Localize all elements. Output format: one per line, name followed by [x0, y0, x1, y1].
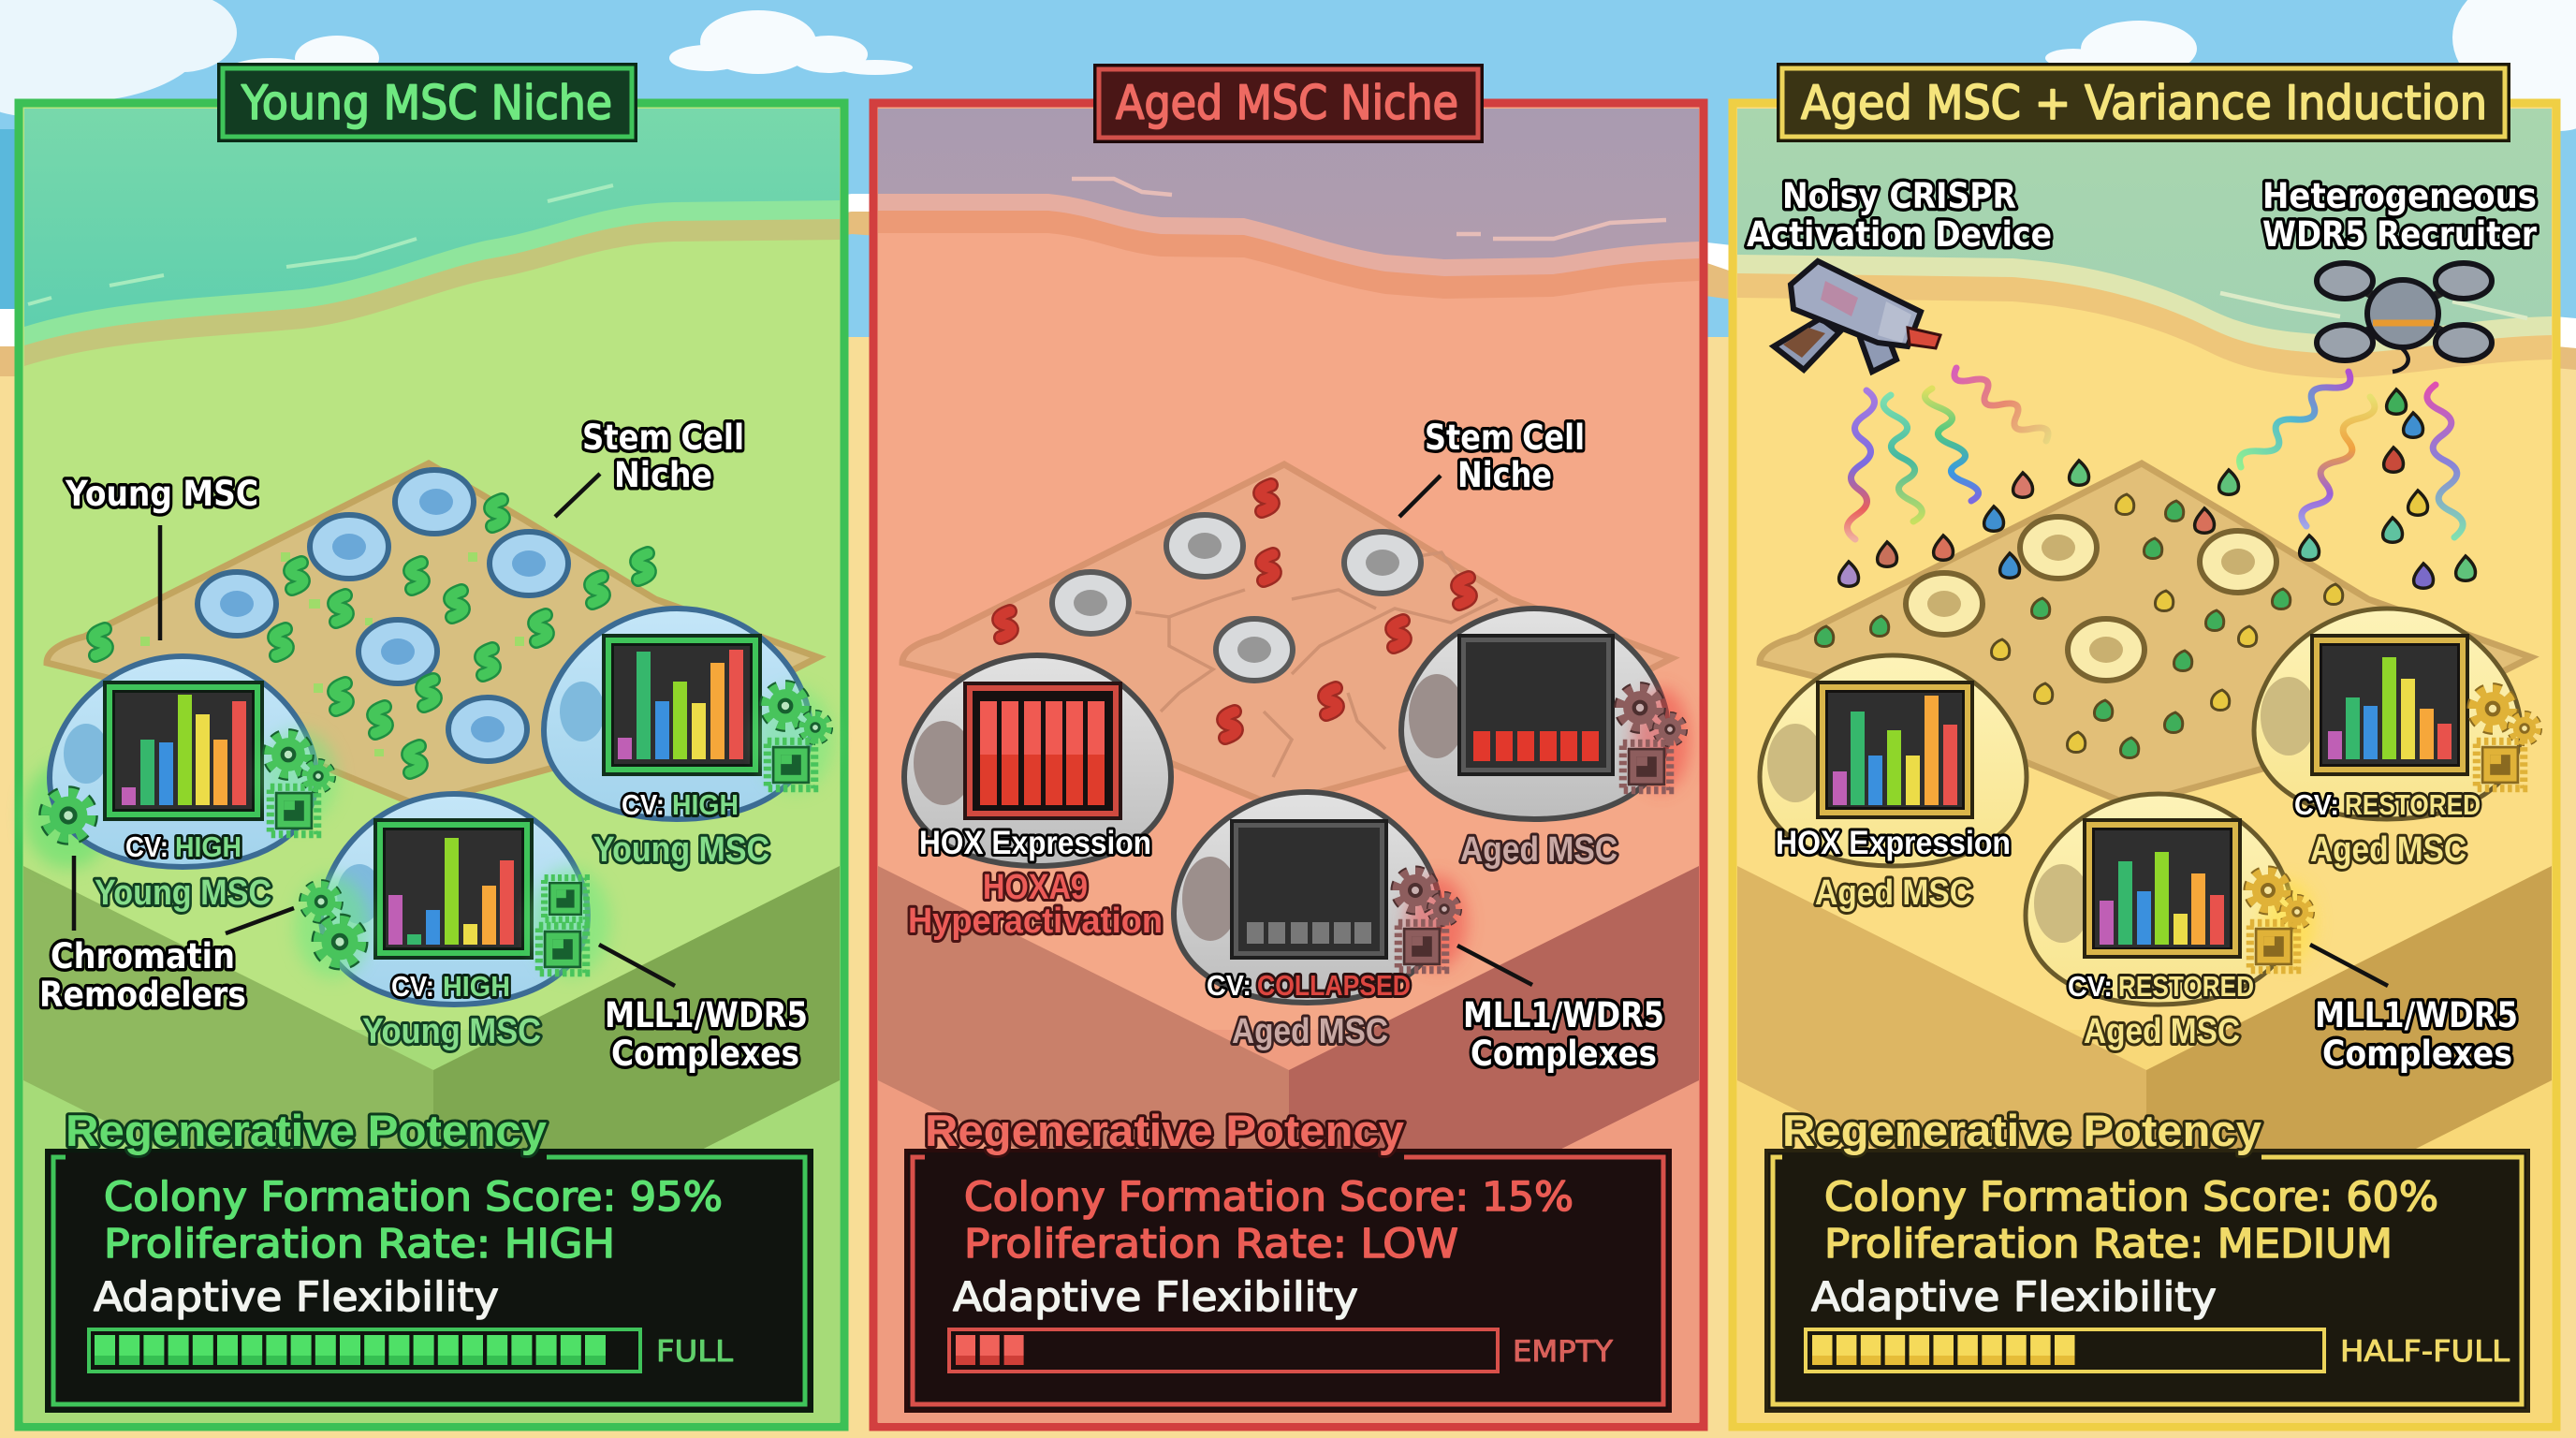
CV restored B: CV:: [2294, 788, 2339, 821]
young MSC cell B: [544, 609, 833, 819]
label: Heterogeneous WDR5 Recruiter: WDR5 Recruiter: [2262, 214, 2538, 255]
panel 2 title badge: [1093, 64, 1484, 143]
colored molecule drops: [1815, 389, 2476, 758]
label: MLL1/WDR5 Complexes: Complexes: [611, 1034, 799, 1074]
heading: Regenerative Potency: Regenerative Potency: [1782, 1106, 2261, 1155]
panel: Aged MSC Niche: [873, 64, 1704, 1427]
colony formation score: Colony Formation Score: 15%: [964, 1174, 1573, 1221]
colony formation score: Colony Formation Score: 60%: [1824, 1174, 2438, 1221]
CV restored C: [2068, 970, 2254, 1003]
stats box: young: [47, 1106, 812, 1411]
colony formation score: Colony Formation Score: 95%: [104, 1174, 723, 1221]
aged MSC cell A hyperactivated: [904, 655, 1171, 866]
CV high C: [391, 970, 510, 1003]
leader line: niche: [1399, 476, 1441, 517]
title text: Aged MSC Niche: [1116, 76, 1458, 130]
label: HOX Expression: HOX Expression: [1776, 825, 2011, 861]
panel 1 frame and ground: [19, 103, 844, 1427]
title text: Young MSC Niche: [241, 76, 612, 130]
monitor with bars: [373, 818, 534, 960]
label: HOXA9 Hyperactivation: HOXA9: [983, 868, 1088, 907]
heterogeneous WDR5 recruiter drone: [2317, 263, 2492, 372]
label: Heterogeneous WDR5 Recruiter: [2262, 176, 2538, 255]
labels aged panel: [908, 418, 1664, 1074]
label: MLL1/WDR5 Complexes: [1463, 995, 1664, 1074]
gears and chips: [295, 868, 610, 978]
leader line: MLL1: [599, 945, 675, 986]
leader line: niche: [555, 474, 600, 517]
panel 2 shoreline and sea: [878, 109, 1699, 299]
proliferation rate: Proliferation Rate: HIGH: [104, 1221, 615, 1268]
stats box: variance: [1766, 1106, 2528, 1411]
progress bar half-full: [1806, 1329, 2324, 1372]
label: MLL1/WDR5 Complexes: [2315, 995, 2518, 1074]
label: HOXA9 Hyperactivation: Hyperactivation: [908, 902, 1163, 941]
small young stem cells: [198, 470, 568, 761]
label: Stem Cell Niche: Stem Cell: [1425, 418, 1585, 458]
title text: Aged MSC + Variance Induction: [1801, 76, 2487, 130]
stats box: aged: [906, 1106, 1670, 1411]
label: MLL1/WDR5 Complexes: Complexes: [2322, 1034, 2512, 1074]
CV collapsed: CV:: [1207, 969, 1251, 1002]
panel 3 shoreline and sea: [1737, 109, 2552, 378]
adaptive flexibility label: Adaptive Flexibility: [94, 1274, 499, 1321]
label: Noisy CRISPR Activation Device: [1747, 176, 2052, 255]
label: MLL1/WDR5 Complexes: MLL1/WDR5: [1463, 995, 1664, 1035]
gears and chip: [2249, 872, 2315, 970]
label: Chromatin Remodelers: Chromatin: [51, 936, 235, 976]
CV high C: CV:: [391, 970, 434, 1003]
label: MLL1/WDR5 Complexes: Complexes: [1471, 1034, 1657, 1074]
CV high A: [125, 830, 242, 863]
niche specks: [140, 552, 588, 756]
restored stem cell niche platform: [1760, 463, 2531, 805]
panel: Aged MSC + Variance Induction: [1733, 63, 2556, 1427]
EMPTY label: EMPTY: [1513, 1335, 1613, 1369]
monitor collapsed bars: [1230, 819, 1388, 960]
label: Stem Cell Niche: Niche: [1457, 455, 1552, 495]
aged MSC cell B: [1401, 609, 1690, 819]
CV collapsed: [1207, 969, 1411, 1002]
monitor with bars: [2310, 634, 2469, 776]
panel 2 frame and ground: [873, 103, 1704, 1427]
panel 1 isometric lower ground: [23, 866, 840, 1423]
Young MSC caption C: Young MSC: [362, 1012, 541, 1051]
label: Noisy CRISPR Activation Device: Noisy CRISPR: [1782, 176, 2016, 216]
monitor with bars: [1816, 681, 1974, 819]
panel 2 isometric lower ground: [878, 866, 1699, 1423]
label: HOX Expression: HOX Expression: [919, 825, 1151, 861]
caption Aged MSC B: Aged MSC: [2310, 830, 2466, 870]
leader line: MLL1: [1457, 946, 1532, 985]
dim gears and chip: [1397, 872, 1467, 970]
label: Stem Cell Niche: Stem Cell: [582, 418, 744, 458]
monitor all red bars: [963, 682, 1122, 820]
caption Aged MSC C: Aged MSC: [1232, 1012, 1388, 1051]
green factor squiggles: [94, 500, 650, 772]
caption Aged MSC A: Aged MSC: [1815, 873, 1972, 913]
Young MSC caption B: Young MSC: [593, 830, 769, 870]
caption Aged MSC B: Aged MSC: [1460, 830, 1617, 870]
panel 3 title badge: [1777, 63, 2510, 142]
monitor low red bars: [1457, 634, 1615, 776]
proliferation rate: Proliferation Rate: LOW: [964, 1221, 1458, 1268]
CV high A: CV:: [125, 830, 168, 863]
cracks: [1135, 552, 1498, 777]
labels variance panel: [1747, 176, 2538, 1074]
monitor with bars: [103, 681, 264, 821]
label: Stem Cell Niche: [582, 418, 744, 495]
label: Stem Cell Niche: Niche: [614, 455, 712, 495]
restored MSC cell C: [2026, 794, 2315, 1005]
panel 1 title badge: [217, 63, 637, 142]
CV collapsed: COLLAPSED: [1257, 969, 1411, 1002]
label: Stem Cell Niche: [1425, 418, 1585, 495]
noisy CRISPR device: [1774, 261, 1940, 372]
rainbow transcript waves: [1847, 368, 2463, 539]
adaptive flexibility label: Adaptive Flexibility: [1811, 1274, 2217, 1321]
gears and chip: [2473, 689, 2538, 788]
adaptive flexibility label: Adaptive Flexibility: [953, 1274, 1358, 1321]
panel 3 isometric lower ground: [1737, 866, 2552, 1423]
leader line: MLL1: [2310, 945, 2388, 986]
CV restored C: CV:: [2068, 970, 2113, 1003]
restored MSC cell A: [1760, 655, 2027, 866]
CV high A: HIGH: [175, 830, 242, 863]
CV high C: HIGH: [443, 970, 510, 1003]
HALF-FULL label: HALF-FULL: [2340, 1335, 2510, 1369]
label: Chromatin Remodelers: [39, 936, 246, 1015]
small yellow stem cells: [1906, 517, 2276, 681]
heading: Regenerative Potency: Regenerative Potency: [66, 1106, 547, 1155]
label: Chromatin Remodelers: Remodelers: [39, 975, 246, 1015]
monitor with bars: [602, 634, 762, 776]
FULL label: FULL: [656, 1335, 734, 1369]
aged MSC cell C: [1174, 792, 1467, 1003]
CV high B: CV:: [622, 788, 665, 821]
label: MLL1/WDR5 Complexes: MLL1/WDR5: [2315, 995, 2518, 1035]
proliferation rate: Proliferation Rate: MEDIUM: [1824, 1221, 2393, 1268]
label: Heterogeneous WDR5 Recruiter: Heterogeneous: [2262, 176, 2537, 216]
gears and chip: [758, 686, 833, 791]
gears and chip: [46, 730, 337, 838]
label: Young MSC: Young MSC: [65, 474, 258, 514]
CV restored C: RESTORED: [2118, 970, 2254, 1003]
leader lines: remodelers: [74, 856, 294, 933]
CV restored B: RESTORED: [2345, 788, 2481, 821]
CV high B: [622, 788, 739, 821]
stem cell niche platform: [47, 463, 818, 805]
caption Aged MSC C: Aged MSC: [2084, 1012, 2240, 1051]
CV high B: HIGH: [672, 788, 739, 821]
progress bar full: [89, 1329, 640, 1372]
panel 3 frame and ground: [1733, 103, 2556, 1427]
progress bar empty: [949, 1329, 1498, 1372]
monitor with bars: [2083, 818, 2242, 959]
label: Noisy CRISPR Activation Device: Activation Device: [1747, 214, 2052, 255]
label: MLL1/WDR5 Complexes: [605, 995, 808, 1074]
small aged stem cells: [1052, 515, 1421, 681]
CV restored B: [2294, 788, 2481, 821]
restored MSC cell B: [2254, 609, 2538, 819]
dim gears and chip: [1620, 688, 1690, 791]
cracked stem cell niche platform: [902, 464, 1672, 805]
young MSC cell C: [295, 794, 610, 1005]
red factor squiggles: [999, 485, 1471, 738]
heading: Regenerative Potency: Regenerative Potency: [925, 1106, 1404, 1155]
Young MSC caption A: Young MSC: [95, 873, 271, 913]
panel: Young MSC Niche: [19, 63, 844, 1427]
label: HOXA9 Hyperactivation: [908, 868, 1163, 941]
labels young panel: [39, 418, 808, 1074]
young MSC cell A: [23, 656, 337, 869]
label: MLL1/WDR5 Complexes: MLL1/WDR5: [605, 995, 808, 1035]
leader line: young MSC: [158, 525, 162, 640]
panel 1 shoreline and sea: [24, 109, 840, 366]
